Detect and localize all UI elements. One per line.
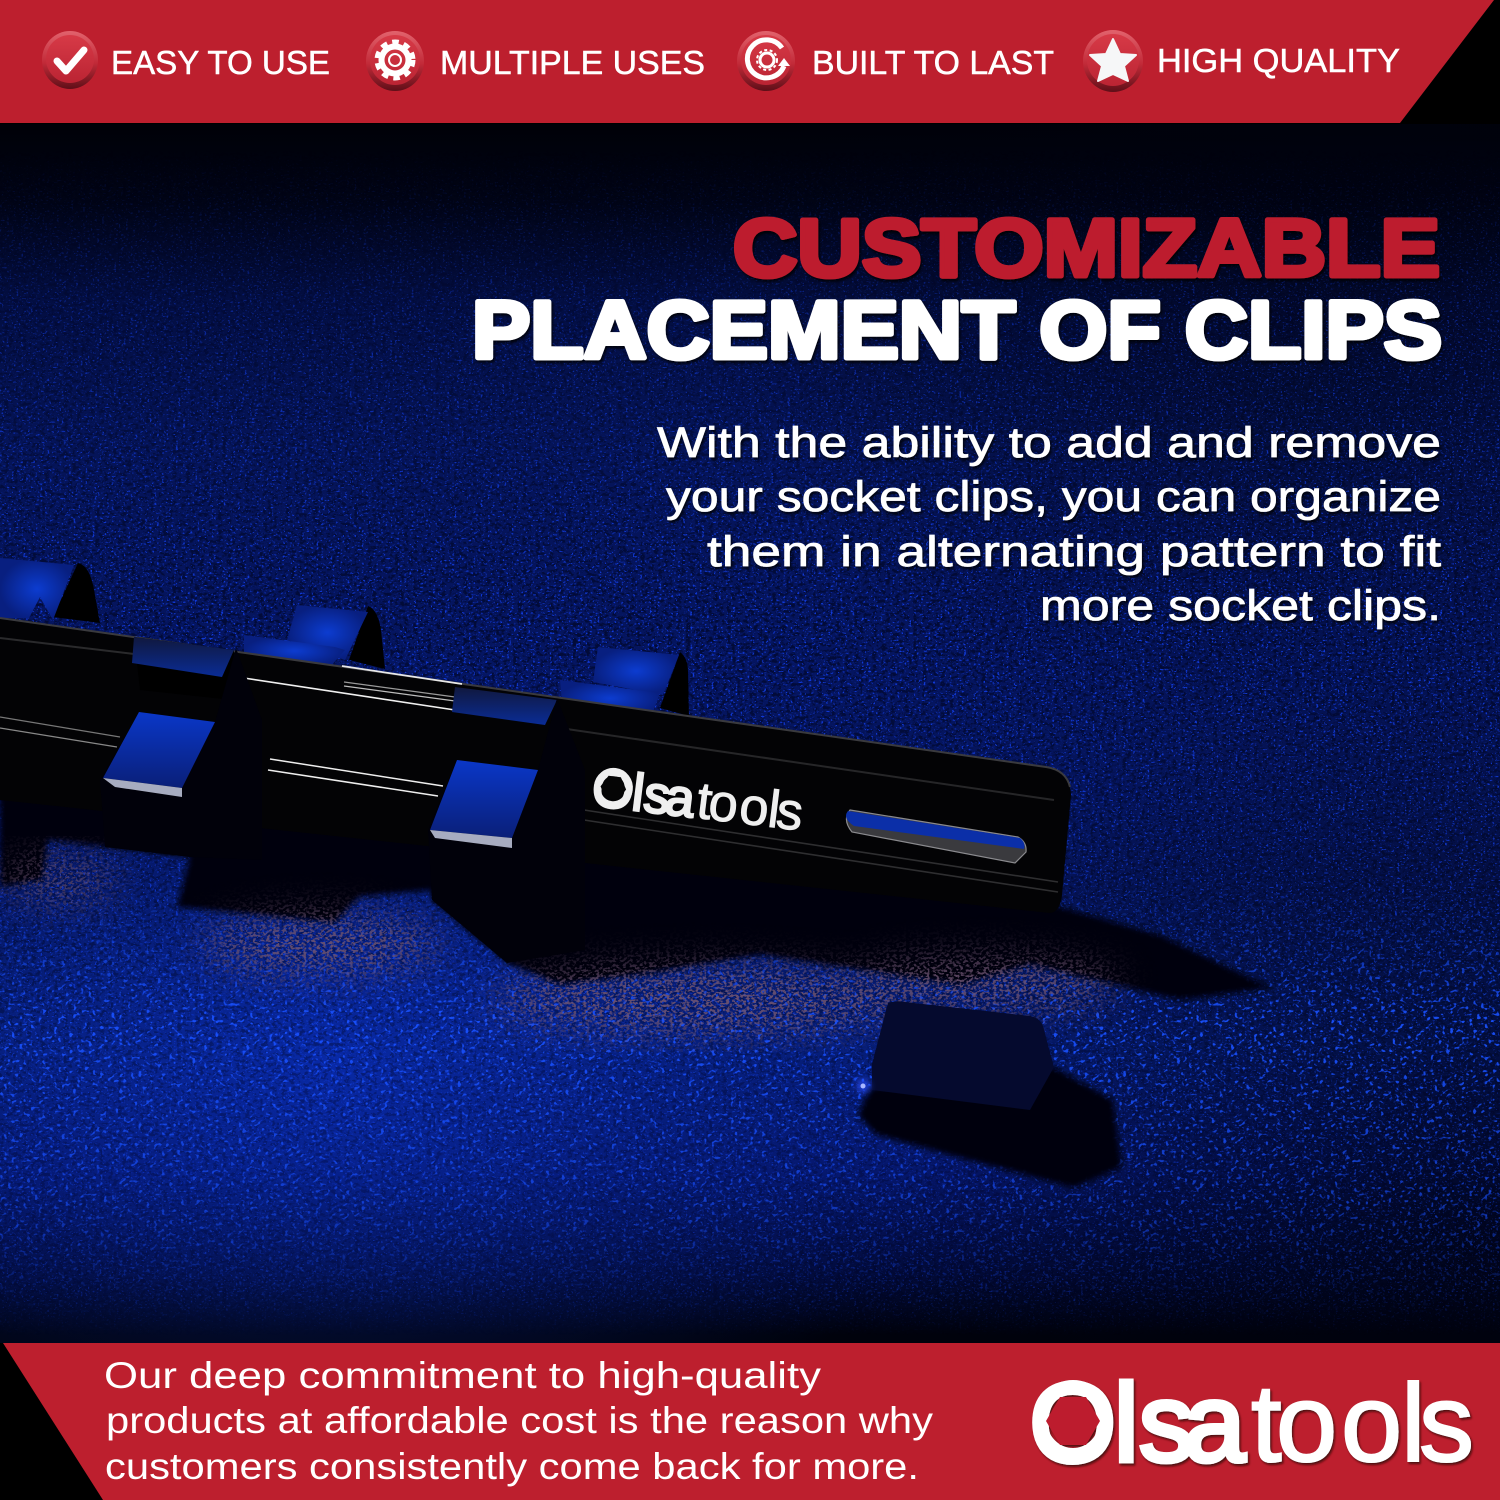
- commitment statement: [104, 1355, 934, 1487]
- body copy: more socket clips.: [1040, 582, 1441, 630]
- body copy: your socket clips, you can organize: [666, 473, 1441, 521]
- Olsatools logo: [1030, 1362, 1474, 1485]
- socket clips on rail: [100, 637, 585, 963]
- icon: check badge: [42, 31, 98, 89]
- icon: star badge: [1083, 30, 1143, 92]
- feature label: built to last: BUILT TO LAST: [812, 44, 1054, 81]
- engraved logo on rail: tools: [694, 772, 806, 843]
- feature label: high quality: HIGH QUALITY: [1157, 42, 1400, 79]
- Olsatools logo: O: [1030, 1362, 1116, 1485]
- headline line: customizable: CUSTOMIZABLE: [733, 203, 1440, 294]
- loose socket clip: [857, 1001, 1122, 1188]
- icon: gear badge: [366, 31, 424, 91]
- commitment statement: products at affordable cost is the reason why: [106, 1400, 934, 1441]
- body copy: With the ability to add and remove: [657, 419, 1441, 467]
- rear clip teeth: [0, 558, 689, 717]
- black socket rail: [0, 618, 1071, 913]
- bottom bar: [0, 1343, 1500, 1500]
- headline line: placement of clips: PLACEMENT OF CLIPS: [472, 285, 1442, 376]
- Olsatools logo: lsa: [1114, 1362, 1246, 1485]
- top feature bar: [0, 0, 1500, 124]
- shadows beneath the rail: [0, 800, 1272, 1052]
- engraved logo on rail: lsa: [629, 764, 699, 829]
- commitment statement: customers consistently come back for more.: [105, 1446, 919, 1487]
- commitment statement: Our deep commitment to high-quality: [104, 1355, 822, 1396]
- engraved logo on rail: O: [589, 759, 637, 822]
- rail mounting slot: [846, 810, 1026, 863]
- feature label: easy to use: EASY TO USE: [111, 44, 330, 81]
- icon: refresh gear badge: [737, 31, 795, 91]
- Olsatools logo: tools: [1251, 1362, 1474, 1485]
- headline: [472, 203, 1442, 376]
- body copy: [657, 419, 1441, 630]
- body copy: them in alternating pattern to fit: [707, 528, 1441, 576]
- engraved logo on rail: [589, 759, 806, 843]
- feature label: multiple uses: MULTIPLE USES: [440, 44, 705, 81]
